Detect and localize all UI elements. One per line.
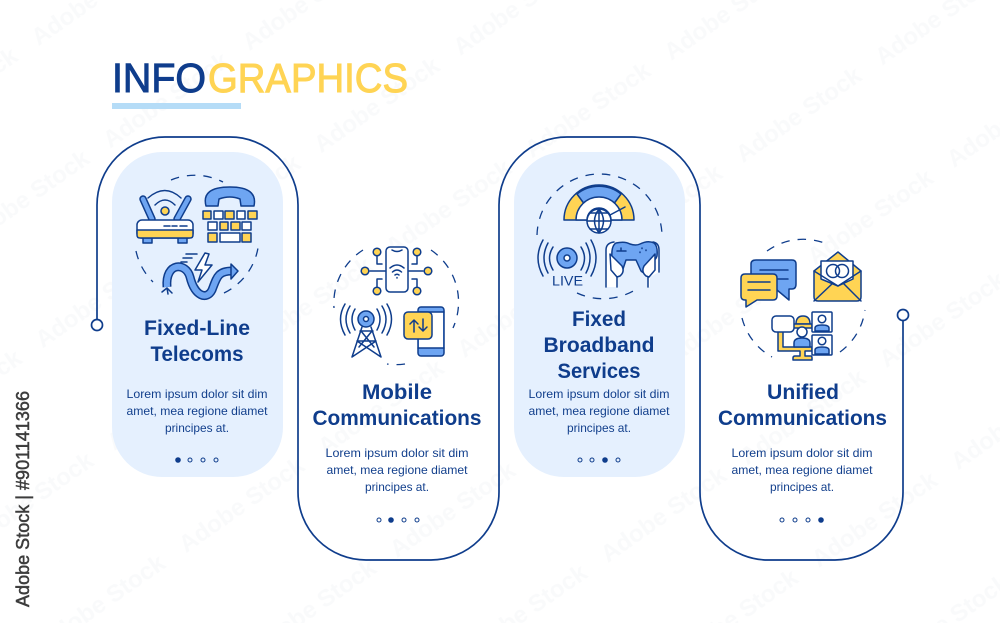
text: unified body: principes at.: [770, 480, 834, 494]
text: fixed broadband body: [528, 387, 670, 435]
icon: router: [137, 190, 193, 243]
text: fixed-line body: amet, mea regione diamet: [126, 404, 268, 418]
heading: mobile communications: [312, 381, 482, 430]
pagination dots 3: [578, 458, 620, 462]
icon: chat bubbles: [741, 260, 796, 307]
text: mobile body: principes at.: [365, 480, 429, 494]
heading: fixed-line telecoms: Fixed-Line: [144, 317, 250, 340]
text: unified body: [732, 446, 873, 494]
icon: unified communications: [741, 239, 865, 360]
heading: unified communications: Unified: [767, 381, 839, 404]
text: unified body: amet, mea regione diamet: [732, 463, 873, 477]
icon: email envelope: [814, 252, 861, 301]
text: fixed-line body: principes at.: [165, 421, 229, 435]
icon: fixed broadband services: [537, 174, 662, 299]
text: fixed broadband body: principes at.: [567, 421, 631, 435]
heading: fixed-line telecoms: Telecoms: [150, 343, 244, 366]
pagination dots 2: [377, 518, 419, 522]
icon: cable with lightning: [162, 253, 238, 296]
icon: fixed-line telecoms: [136, 175, 258, 296]
icon: live broadcast: LIVE: [552, 272, 583, 288]
text: unified body: Lorem ipsum dolor sit dim: [732, 446, 872, 460]
icon: telephone with keypad: [203, 187, 257, 242]
text: fixed broadband body: amet, mea regione diamet: [528, 404, 670, 418]
icon: signal tower: [340, 304, 392, 357]
icon: data transfer phone: [404, 307, 444, 356]
text: mobile body: amet, mea regione diamet: [326, 463, 468, 477]
title: GRAPHICS: [208, 55, 408, 101]
heading: mobile communications: Mobile: [362, 381, 432, 404]
connecting outline frame: [92, 137, 908, 560]
heading: unified communications: [718, 381, 887, 430]
icon: mobile communications: [334, 247, 459, 365]
heading: fixed-line telecoms: [144, 317, 250, 366]
icon: video conference: [772, 312, 832, 360]
panel: fixed broadband background: [514, 152, 685, 477]
heading: mobile communications: Communications: [312, 407, 482, 430]
heading: unified communications: Communications: [718, 407, 887, 430]
text: mobile body: [326, 446, 468, 494]
icon: speed gauge with globe: [564, 185, 634, 233]
heading: fixed broadband services: [544, 308, 654, 383]
text: fixed broadband body: Lorem ipsum dolor sit dim: [528, 387, 670, 401]
icon: game controller: [606, 242, 659, 287]
stock watermark id: Adobe Stock | #901141366: [13, 391, 33, 607]
title underline: [112, 103, 241, 109]
text: mobile body: Lorem ipsum dolor sit dim: [326, 446, 468, 460]
panel: fixed-line background: [112, 152, 283, 477]
heading: fixed broadband services: Services: [558, 360, 640, 383]
pagination dots 4: [780, 518, 823, 522]
heading: fixed broadband services: Broadband: [544, 334, 654, 357]
heading: fixed broadband services: Fixed: [572, 308, 626, 331]
title: [112, 55, 408, 101]
text: fixed-line body: Lorem ipsum dolor sit dim: [126, 387, 268, 401]
icon: smartphone network: [361, 247, 432, 295]
text: fixed-line body: [126, 387, 268, 435]
pagination dots 1: [176, 458, 218, 462]
title: INFO: [112, 55, 206, 101]
